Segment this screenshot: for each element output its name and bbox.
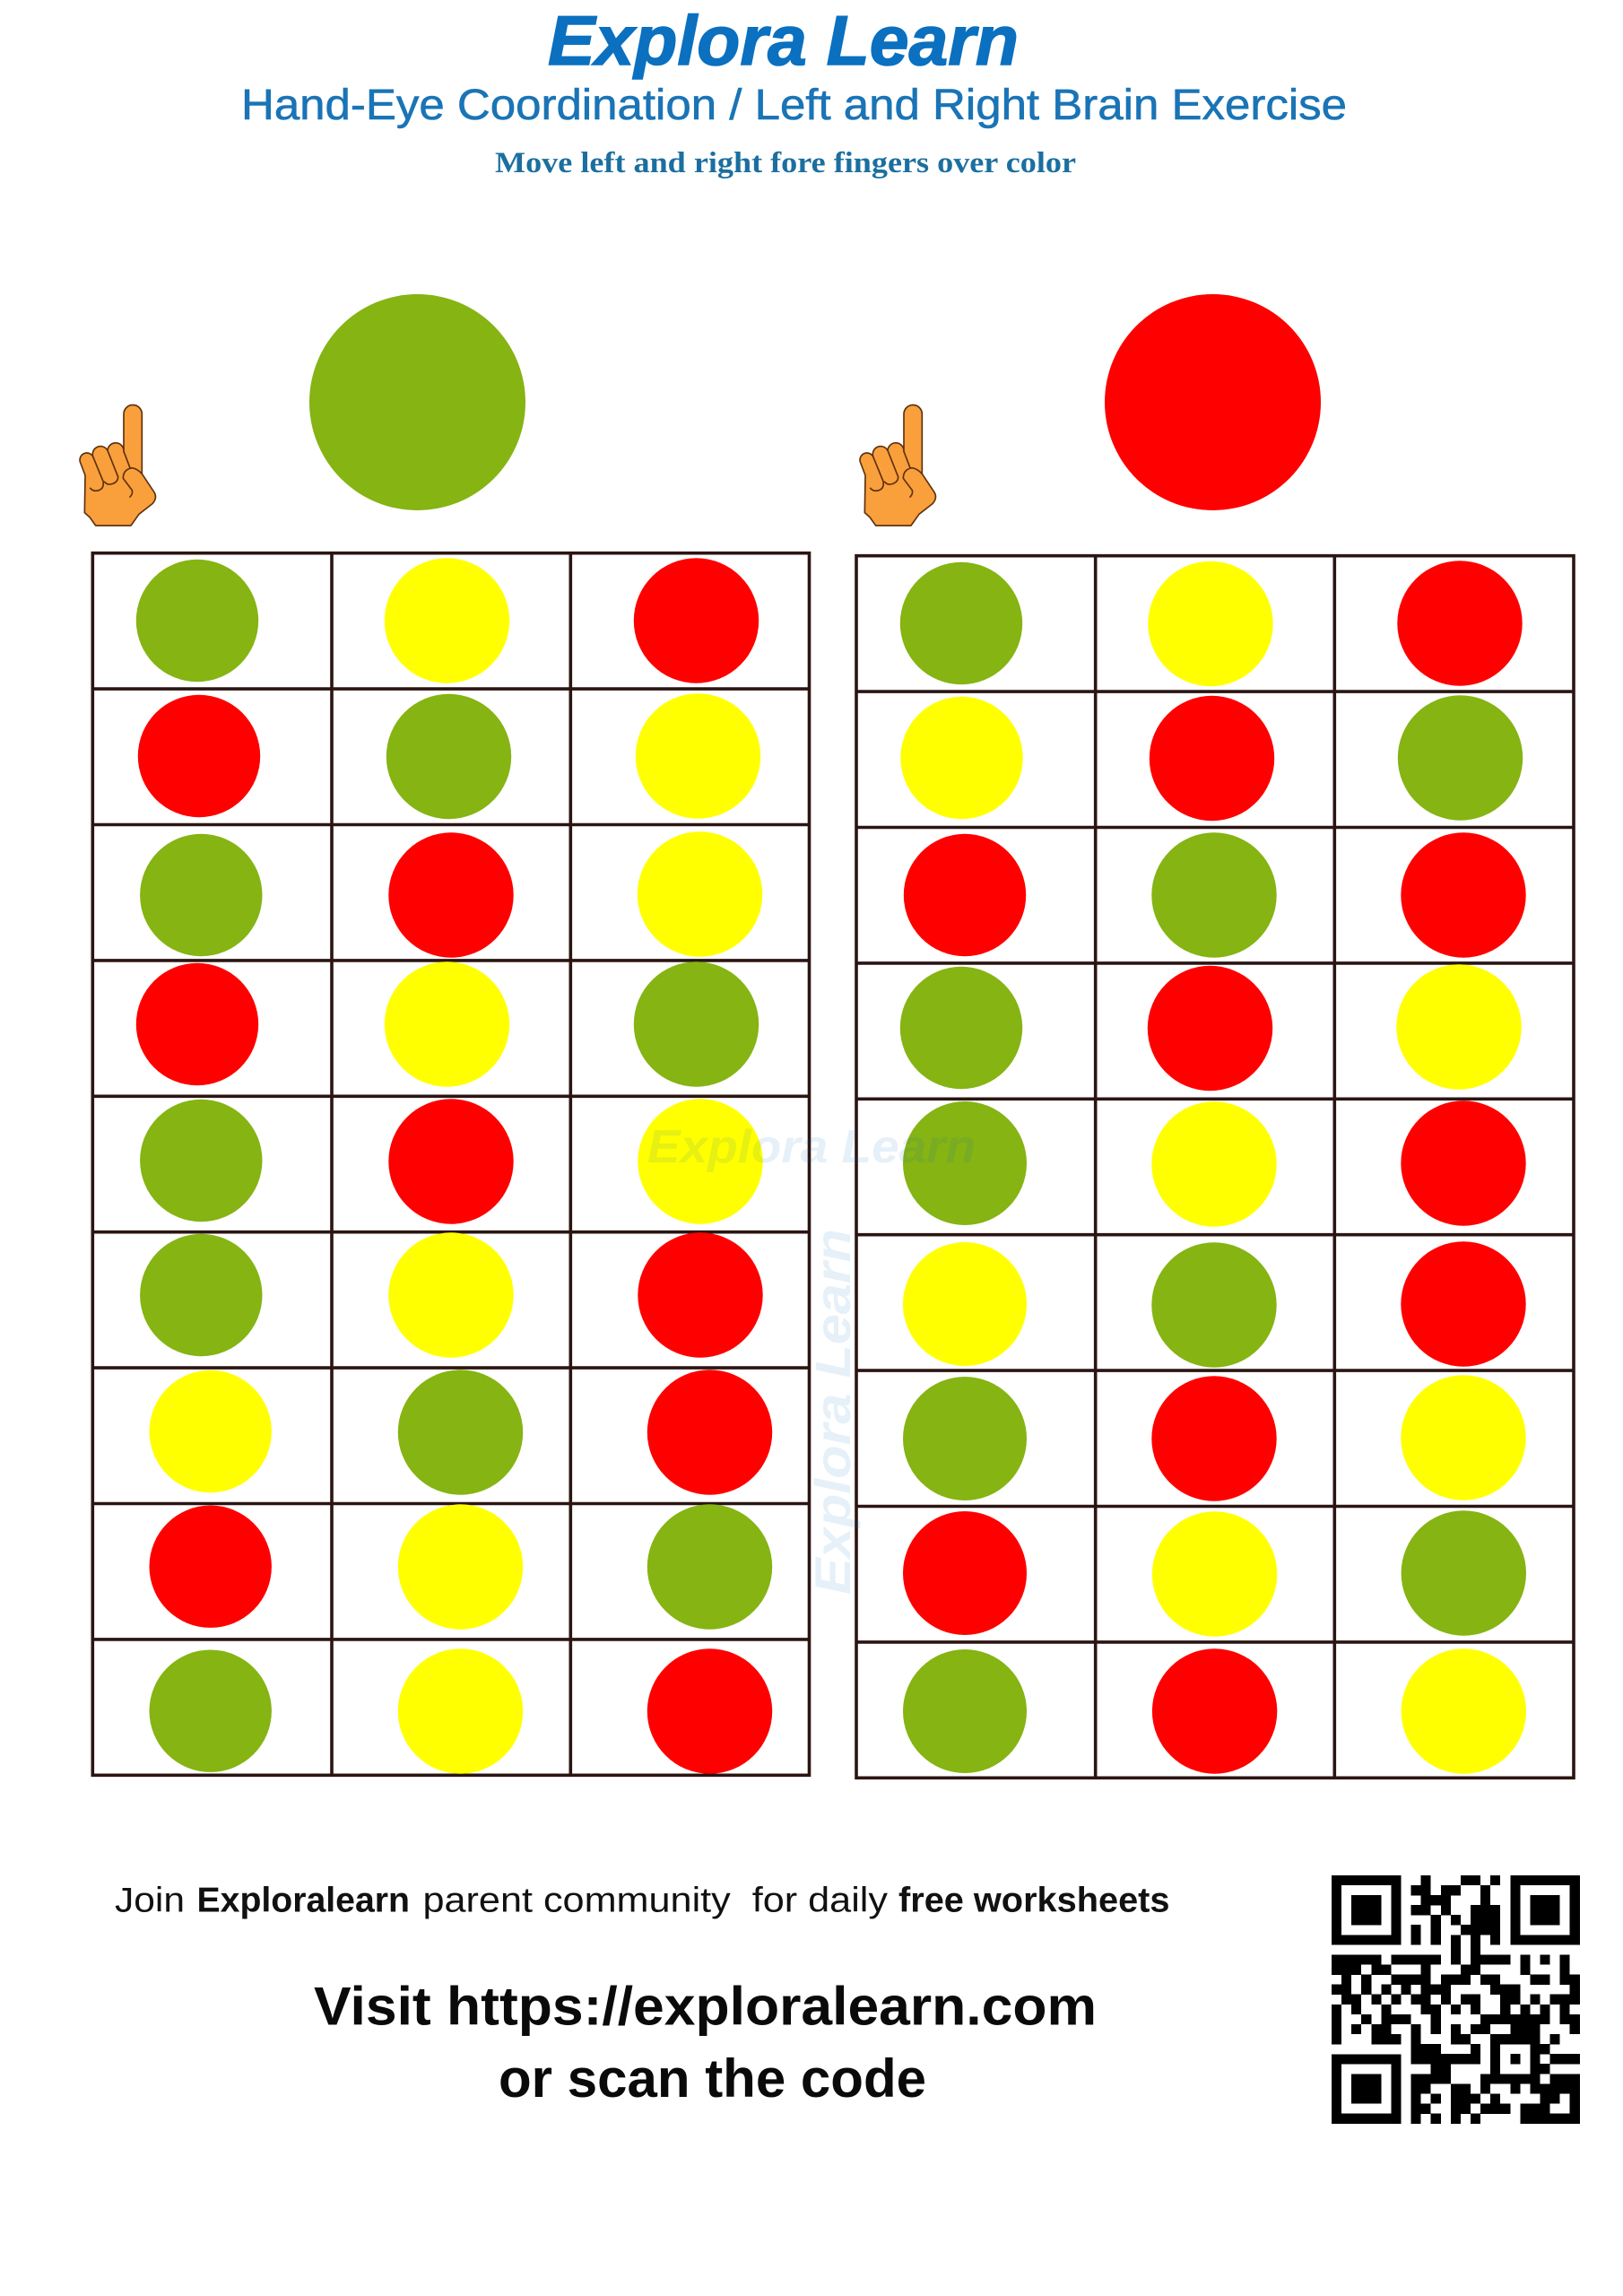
big red target circle [1105,294,1321,510]
website call to action: Visit https://exploralearn.com [314,1977,1097,2036]
right colour grid [856,556,1574,1778]
left row 8 [149,1504,772,1630]
horizontal watermark: Explora Learn [647,1121,976,1173]
instruction line: Move left and right fore fingers over color [495,147,1076,179]
community invitation line [115,1882,1169,1919]
community invitation line: free worksheets [898,1882,1169,1919]
community invitation line: parent community for daily [423,1882,889,1919]
vertical watermark: Explora Learn [804,1229,861,1595]
community invitation line: Join [115,1882,185,1919]
big green target circle [309,294,525,510]
left row 2 [138,693,760,819]
title: Explora Learn [548,1,1019,80]
left row 9 [149,1648,772,1774]
left colour grid [92,553,810,1775]
subtitle: Hand-Eye Coordination / Left and Right Brain Exercise [241,82,1347,129]
community invitation line: Exploralearn [197,1882,410,1919]
icon: right pointing hand [860,404,935,526]
left row 1 [136,558,759,683]
right row 7 [903,1375,1526,1501]
left row 7 [149,1370,772,1495]
right row 2 [900,695,1523,821]
right row 8 [903,1510,1526,1637]
right row 6 [903,1241,1526,1368]
right row 5 [903,1100,1526,1227]
left row 6 [140,1232,763,1358]
left row 5 [140,1099,763,1224]
scan call to action: or scan the code [499,2048,926,2109]
right row 1 [900,561,1523,686]
right row 9 [903,1648,1526,1774]
right row 3 [904,832,1526,958]
left row 3 [140,831,762,958]
right row 4 [900,964,1522,1091]
left row 4 [136,961,759,1087]
QR code [1332,1875,1580,2124]
icon: left pointing hand [80,404,155,526]
